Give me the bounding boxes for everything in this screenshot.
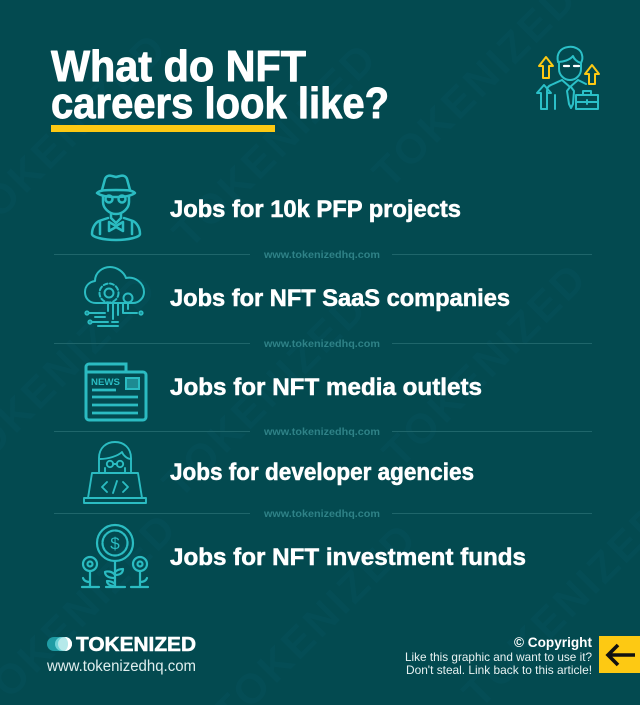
text: TOKENIZED [163,33,387,256]
icon: cloud with gear and circuit [85,267,144,326]
label: Jobs for NFT media outlets [170,374,482,401]
item 2: SaaS companies [85,267,510,326]
label: Jobs for NFT SaaS companies [170,285,510,312]
item 1: PFP projects [92,176,461,240]
text: TOKENIZED [373,253,597,476]
icon: newspaper: NEWS [91,377,120,387]
copyright note: Like this graphic and want to use it? [405,650,592,664]
copyright note [405,635,592,677]
label: Jobs for NFT investment funds [170,544,526,571]
icon: money plants: $ [110,534,120,553]
title [51,42,389,128]
yellow arrow box [599,636,640,673]
footer logo: TOKENIZED [76,634,196,656]
item 3: media outlets [86,364,482,420]
icon: developer at laptop [84,442,146,503]
title underline [51,125,275,132]
logo mark [47,637,72,651]
icon: money plants [82,525,148,587]
title: What do NFT [51,42,306,91]
footer logo [46,634,196,675]
icon: person with hat and glasses [92,176,140,240]
copyright note: © Copyright [514,635,592,650]
item 4: developer agencies [84,442,474,503]
label: Jobs for developer agencies [170,459,474,486]
label: Jobs for 10k PFP projects [170,196,461,223]
icon: businessman with arrows [537,47,599,109]
title: careers look like? [51,79,389,128]
divider with url 3: www.tokenizedhq.com [263,426,380,438]
divider with url 2: www.tokenizedhq.com [263,338,380,350]
divider with url 1: www.tokenizedhq.com [263,249,380,261]
icon: newspaper [86,364,146,420]
item 5: investment funds [82,525,526,587]
divider with url 4: www.tokenizedhq.com [263,508,380,520]
footer logo: www.tokenizedhq.com [46,658,196,675]
text: TOKENIZED [153,283,377,506]
copyright note: Don't steal. Link back to this article! [406,663,592,677]
